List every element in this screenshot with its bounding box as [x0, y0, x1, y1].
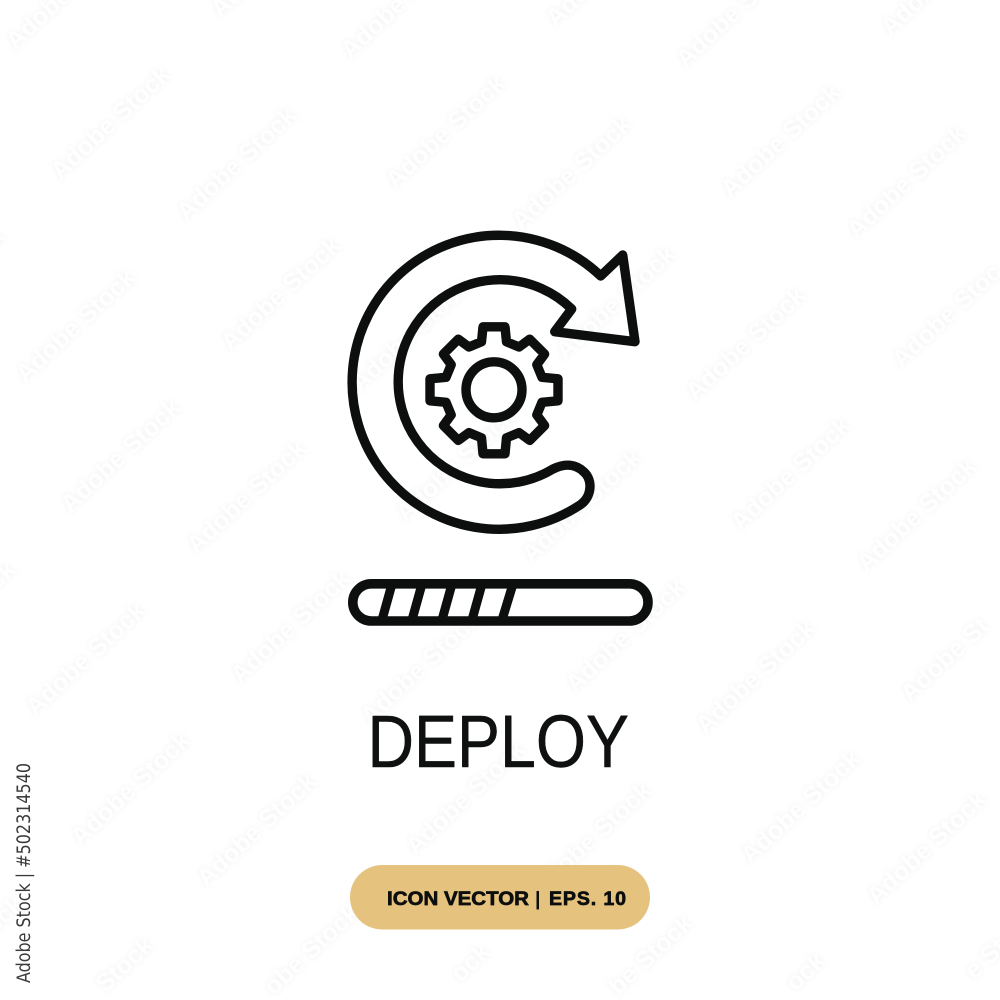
badge: icon vector: ICON VECTOR [387, 888, 529, 910]
side credit text: Adobe Stock | #502314540 [14, 763, 35, 983]
watermark pattern: Adobe Stock [345, 272, 476, 397]
watermark pattern: Adobe Stock [355, 605, 486, 730]
watermark pattern: Adobe Stock [45, 60, 176, 185]
watermark pattern: obe Stock [258, 899, 365, 1000]
watermark pattern: Adobe Stock [715, 78, 846, 203]
watermark pattern: Adobe Stock [851, 452, 982, 577]
watermark pattern: be Stock [603, 909, 698, 1000]
watermark pattern: Adobe Stock [400, 735, 531, 860]
watermark pattern: Adobe Stock [506, 110, 637, 235]
watermark pattern: Adobe Stock [516, 443, 647, 568]
badge: icon vector [350, 865, 650, 930]
watermark pattern: Adobe Stock [225, 564, 356, 689]
watermark pattern: ock [780, 947, 831, 997]
watermark pattern: Adobe Stock [560, 573, 691, 698]
watermark pattern: Adobe Stock [55, 393, 186, 518]
progress bar [353, 584, 648, 621]
watermark pattern: Adobe Stock [841, 119, 972, 244]
watermark pattern: Adobe Stock [10, 263, 141, 388]
watermark pattern: Adobe Stock [215, 231, 346, 356]
watermark pattern: Adobe Stock [690, 614, 821, 739]
icon: gear [430, 327, 558, 454]
watermark pattern: Adobe St [895, 612, 995, 707]
watermark pattern: Adobe Stock [725, 411, 856, 536]
icon: circular arrow [352, 235, 635, 529]
watermark pattern: Adobe Stock [680, 281, 811, 406]
watermark pattern: Adobe Stock [526, 776, 657, 901]
watermark pattern: Adobe Stock [171, 101, 302, 226]
badge: icon vector: | [535, 888, 540, 910]
watermark pattern: Adobe Stock [735, 744, 866, 869]
watermark pattern: Stock [90, 931, 159, 998]
watermark pattern: Adobe Stock [550, 240, 681, 365]
watermark pattern: Adobe Stock [20, 596, 151, 721]
icon: deploy arrow with gear [352, 235, 635, 529]
watermark pattern: Adobe Stock [380, 69, 511, 194]
watermark pattern: Adobe Stock [390, 402, 521, 527]
watermark pattern: Adobe Stock [861, 785, 992, 910]
watermark pattern: Adobe Stock [65, 726, 196, 851]
watermark pattern: Adobe Stock [181, 434, 312, 559]
watermark pattern: ock [445, 938, 496, 988]
watermark pattern: Adobe Stock [191, 767, 322, 892]
badge: icon vector: EPS. 10 [549, 888, 626, 910]
title: DEPLOY: DEPLOY [368, 700, 629, 783]
